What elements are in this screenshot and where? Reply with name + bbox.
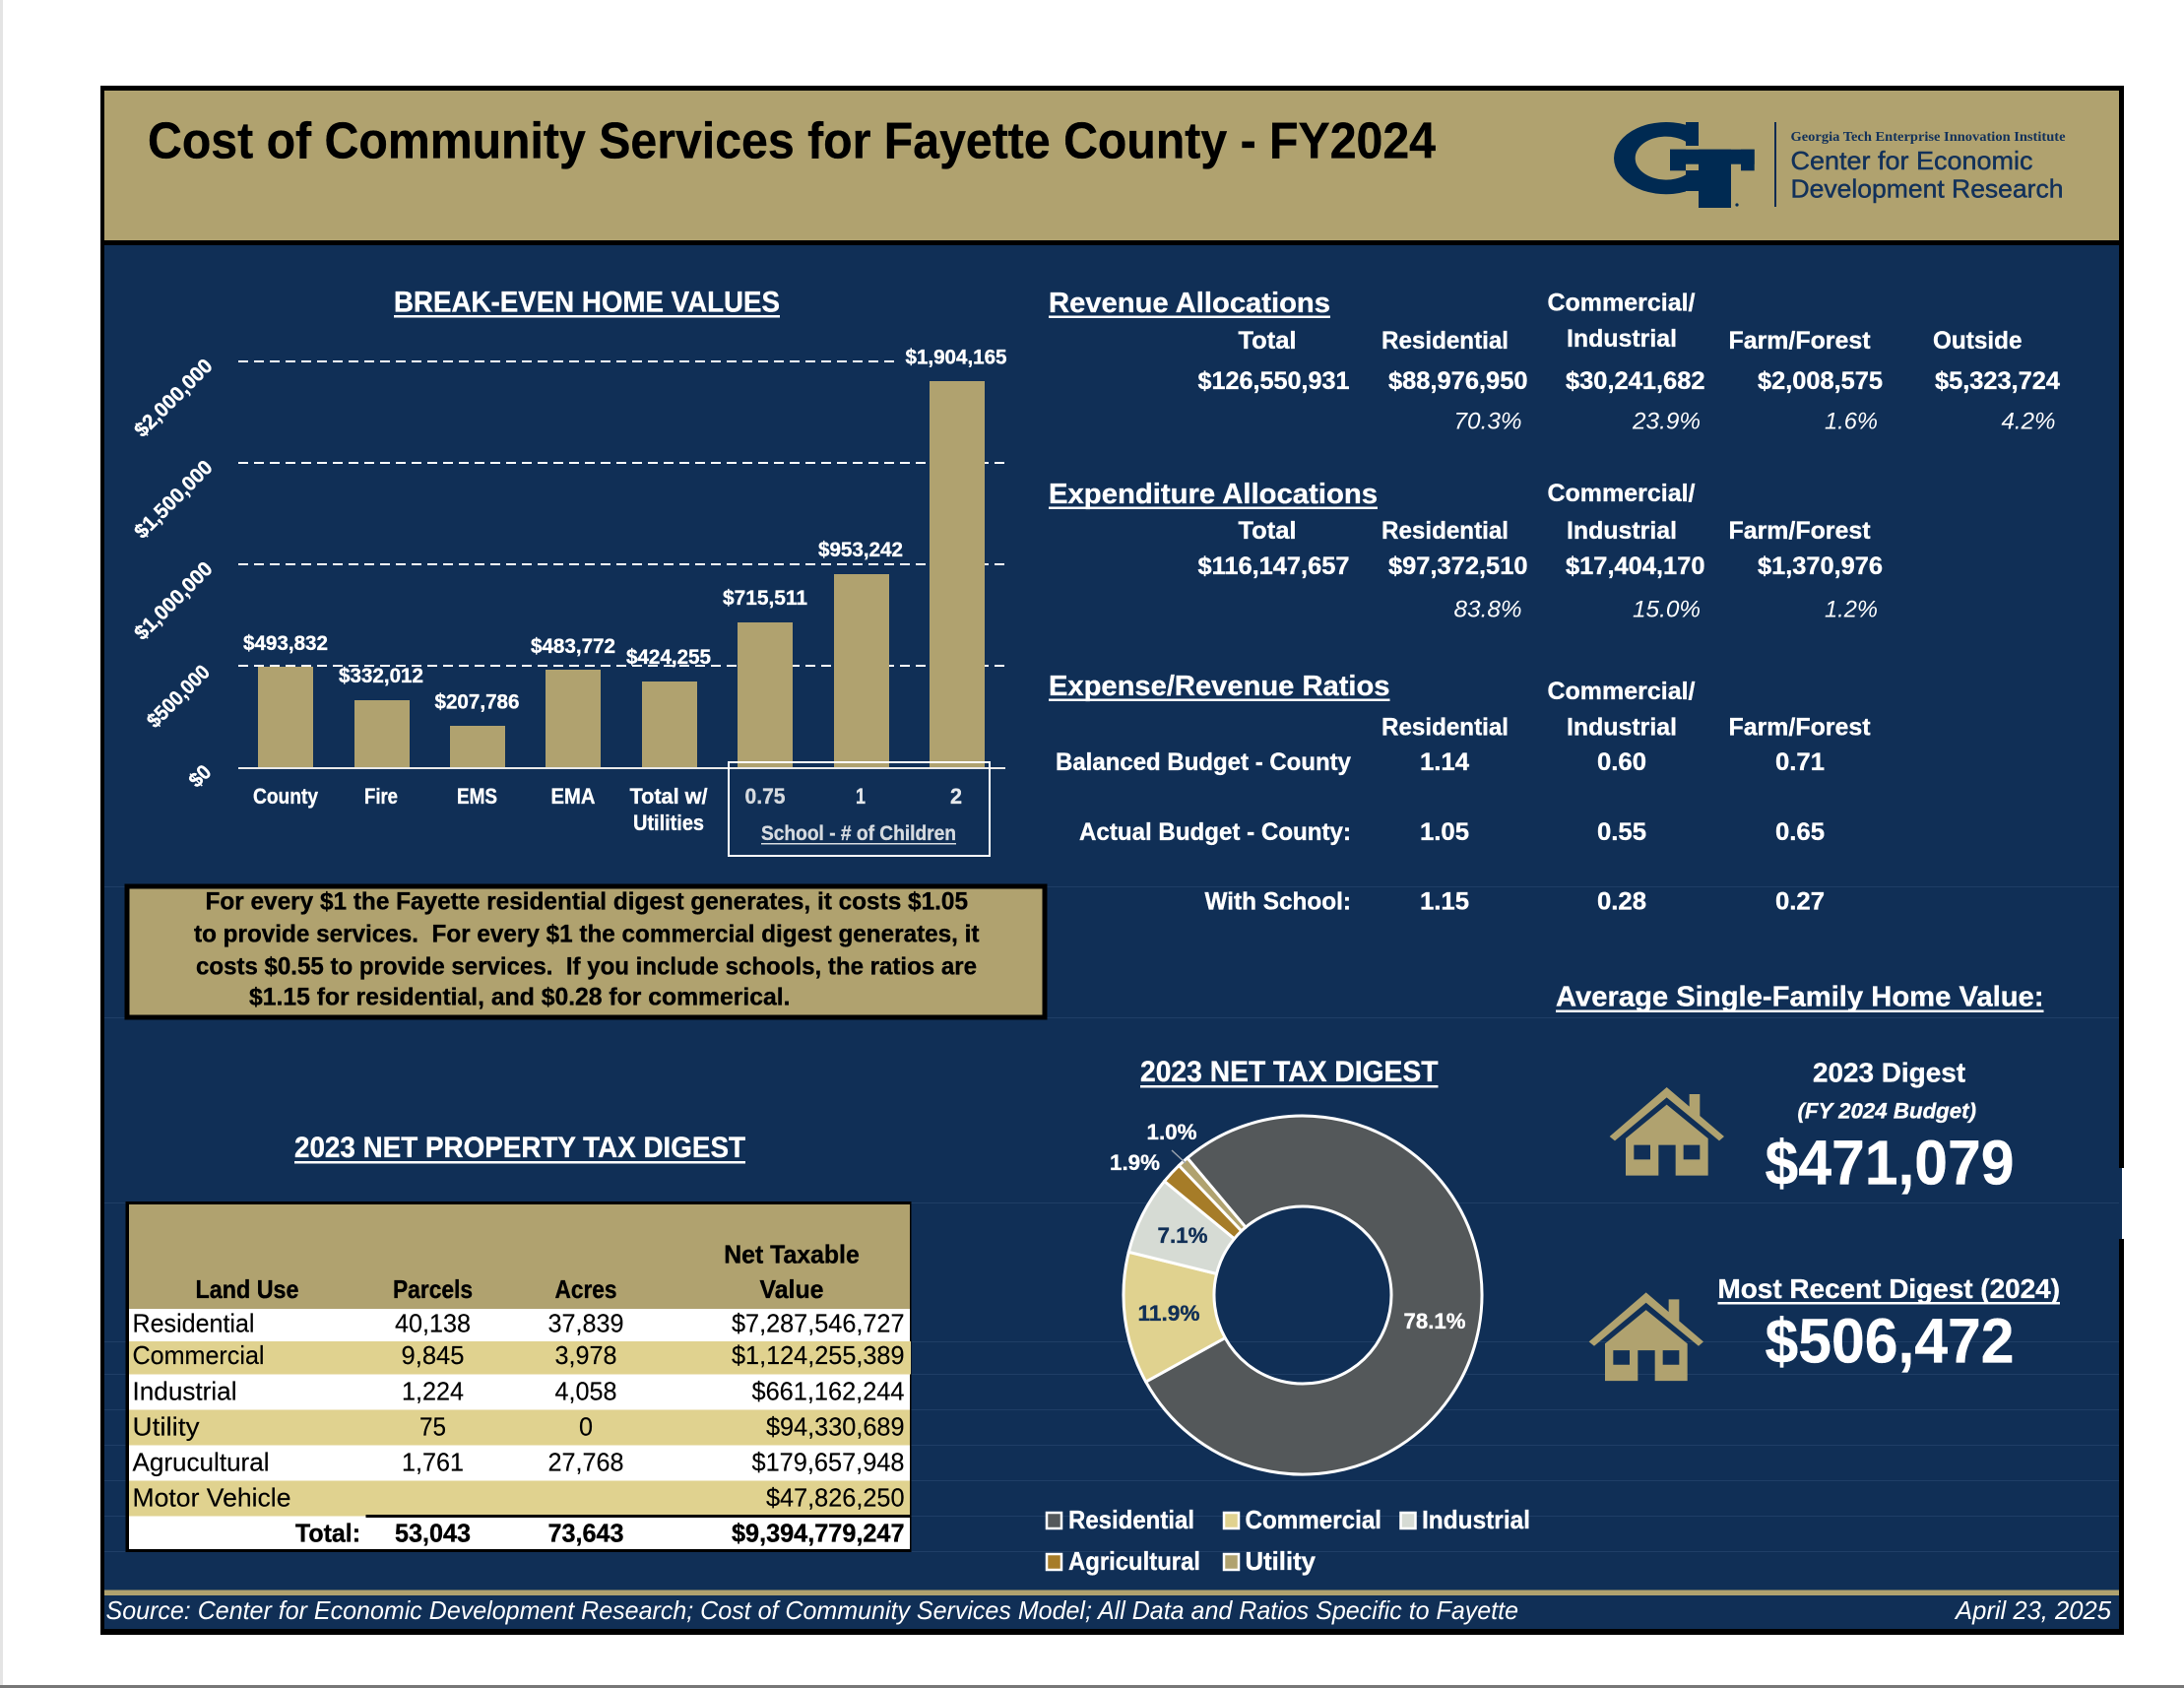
segment: residential 78.1% [1146,1116,1482,1474]
row labels: Commercial [132,1340,264,1370]
panel: expense/revenue ratios: Commercial/ [1548,678,1696,705]
panel: expenditure allocations: $116,147,657 [1197,552,1349,580]
bar value labels: $483,772 [531,635,615,658]
date: April 23, 2025 [1954,1595,2112,1625]
category labels [253,784,962,835]
callout: ratio summary: costs $0.55 to provide services. If you include schools, the ratios are [196,953,977,981]
legend: Agricultural [1068,1546,1200,1576]
callout: ratio summary: For every $1 the Fayette residential digest generates, it costs $1.05 [205,888,968,916]
parcels column: 1,224 [402,1377,464,1406]
table: net property tax digest [126,1201,912,1552]
row labels: Total: [295,1519,360,1548]
footer [104,1590,2119,1625]
logo mark [1614,122,1755,208]
heading: expense/revenue ratios: Expense/Revenue Ratios [1049,671,1390,702]
bar value labels: $332,012 [339,665,423,687]
panel: expense/revenue ratios: 0.55 [1597,818,1646,846]
net taxable value column: $94,330,689 [766,1412,904,1442]
row labels: Motor Vehicle [132,1483,291,1513]
category labels: Total w/ [630,784,707,809]
panel: revenue allocations: Industrial [1567,325,1677,353]
net taxable value column: $9,394,779,247 [732,1519,904,1548]
bars [258,381,985,768]
panel: expense/revenue ratios: 0.28 [1597,888,1646,916]
panel: revenue allocations: 23.9% [1632,408,1701,435]
heading: average single-family home value: Average Single-Family Home Value: [1556,981,2044,1012]
panel: expenditure allocations: Residential [1381,517,1509,545]
source note: Source: Center for Economic Development Research; Cost of Community Services Model; All Data and Ratios Specific to Fayette [106,1595,1518,1625]
panel: revenue allocations: Farm/Forest [1729,327,1871,355]
panel: expense/revenue ratios: 0.60 [1597,748,1646,776]
logo: Georgia Tech Center for Economic Development Research: Development Research [1790,173,2064,203]
bar value labels: $1,904,165 [906,347,1007,368]
parcels column: 53,043 [395,1519,471,1548]
row labels [132,1308,360,1548]
panel: revenue allocations: Residential [1381,327,1509,355]
panel: expenditure allocations: Total [1239,517,1296,545]
panel: expenditure allocations: Commercial/ [1548,480,1696,507]
row labels: Agrucultural [132,1448,270,1477]
donut labels [1110,1120,1465,1333]
header banner [104,91,2119,240]
donut labels: 11.9% [1138,1301,1199,1326]
panel: expenditure allocations: 15.0% [1633,597,1701,622]
panel: revenue allocations: Total [1239,327,1296,355]
heading: 2023 net property tax digest: 2023 NET PROPERTY TAX DIGEST [294,1132,745,1164]
segment: industrial 7.1% [1128,1181,1235,1273]
acres column [547,1308,624,1548]
panel: expenditure allocations [1049,479,1883,622]
stat: most recent digest value [1717,1273,2060,1377]
y axis labels: $500,000 [143,661,215,733]
logo: Georgia Tech Center for Economic Development Research [1614,122,2066,208]
acres column: 0 [579,1412,593,1442]
donut chart: 2023 net tax digest [1124,1116,1482,1474]
panel: expenditure allocations: Industrial [1567,517,1677,545]
y axis labels: $1,500,000 [130,456,218,544]
heading: expenditure allocations: Expenditure Allocations [1049,479,1378,510]
panel: revenue allocations: $5,323,724 [1935,367,2060,395]
panel: expense/revenue ratios: Farm/Forest [1729,713,1871,741]
panel: expenditure allocations: Farm/Forest [1729,517,1871,545]
legend: Industrial [1422,1505,1530,1534]
acres column: 3,978 [555,1340,616,1370]
panel: expense/revenue ratios: Actual Budget - County: [1079,818,1351,846]
bar value labels: $953,242 [818,539,903,561]
acres column: 73,643 [547,1519,624,1548]
panel: expense/revenue ratios [1049,671,1871,916]
segment: utility 1.0% [1179,1158,1246,1231]
callout: ratio summary: to provide services. For every $1 the commercial digest generates, it [194,920,980,947]
panel: revenue allocations: $88,976,950 [1388,367,1528,395]
panel: revenue allocations: 4.2% [2001,408,2056,435]
donut labels: 1.0% [1146,1120,1197,1144]
panel: revenue allocations [1049,288,2060,435]
net taxable value column: $179,657,948 [752,1448,904,1477]
heading: 2023 net tax digest: 2023 NET TAX DIGEST [1140,1056,1438,1088]
segment: agricultural 1.9% [1164,1165,1242,1239]
heading: revenue allocations: Revenue Allocations [1049,288,1330,319]
acres column: 4,058 [555,1377,616,1406]
panel: expense/revenue ratios: Residential [1381,713,1509,741]
row labels: Industrial [132,1377,236,1406]
category labels: County [253,784,319,809]
net taxable value column: $7,287,546,727 [732,1308,904,1337]
panel: expense/revenue ratios: With School: [1205,888,1351,916]
panel: revenue allocations: Commercial/ [1548,290,1696,317]
panel: revenue allocations: $30,241,682 [1566,367,1705,395]
panel: expense/revenue ratios: 0.65 [1775,818,1825,846]
panel: expense/revenue ratios: 1.05 [1420,818,1469,846]
parcels column: 40,138 [395,1308,471,1337]
panel: expense/revenue ratios: 0.27 [1775,888,1825,916]
y axis labels [130,355,218,792]
parcels column: 75 [419,1412,446,1442]
category labels: 1 [856,784,866,809]
category labels: EMA [551,784,596,809]
net taxable value column: $661,162,244 [752,1377,904,1406]
donut labels: 78.1% [1404,1309,1465,1333]
row labels: Residential [132,1308,254,1337]
category labels: EMS [457,784,497,809]
net taxable value column: $47,826,250 [766,1483,904,1513]
school bracket [729,762,990,856]
table header: Land Use [195,1274,299,1304]
stat: 2023 digest value: $471,079 [1765,1127,2015,1198]
bar value labels: $715,511 [723,587,807,610]
y axis labels: $1,000,000 [130,557,218,645]
panel: expenditure allocations: 83.8% [1453,597,1522,622]
icon: house (most recent digest) [1589,1292,1703,1381]
table header: Acres [555,1274,616,1304]
donut labels: 7.1% [1158,1223,1207,1248]
segment: commercial 11.9% [1124,1252,1225,1382]
panel: expense/revenue ratios: 1.15 [1420,888,1469,916]
panel: expenditure allocations: $1,370,976 [1758,552,1883,580]
icon: house (2023 digest) [1610,1087,1724,1176]
legend: Utility [1245,1546,1317,1576]
panel: expenditure allocations: 1.2% [1825,597,1878,622]
heading: break-even home values: BREAK-EVEN HOME VALUES [394,286,780,319]
parcels column: 9,845 [402,1340,465,1370]
bar value labels: $207,786 [435,691,520,713]
donut labels: 1.9% [1110,1150,1160,1175]
panel: expense/revenue ratios: Balanced Budget - County [1056,748,1351,776]
acres column: 37,839 [547,1308,624,1337]
legend [1047,1505,1530,1576]
parcels column: 1,761 [402,1448,464,1477]
panel: expense/revenue ratios: Industrial [1567,713,1677,741]
net taxable value column [732,1308,904,1548]
table header: Parcels [393,1274,473,1304]
bar value labels [243,347,1007,713]
table header: Net Taxable [724,1239,860,1268]
legend: Residential [1068,1505,1194,1534]
category labels: Utilities [633,811,704,835]
title: Cost of Community Services for Fayette County - FY2024 [148,112,1436,169]
panel: revenue allocations: $126,550,931 [1197,367,1350,395]
parcels column [395,1308,471,1548]
panel: expenditure allocations: $97,372,510 [1388,552,1528,580]
logo: Georgia Tech Center for Economic Development Research: Georgia Tech Enterprise Innovation Institute [1790,130,2066,145]
row labels: Utility [132,1412,199,1442]
panel: expense/revenue ratios: 0.71 [1775,748,1825,776]
table header: Value [760,1274,823,1304]
bar value labels: $424,255 [626,646,711,669]
panel: expense/revenue ratios: 1.14 [1420,748,1469,776]
panel: revenue allocations: 70.3% [1453,408,1522,435]
panel: revenue allocations: $2,008,575 [1758,367,1883,395]
panel: expenditure allocations: $17,404,170 [1566,552,1705,580]
category labels: 0.75 [744,784,786,809]
callout: ratio summary: $1.15 for residential, and $0.28 for commerical. [249,983,790,1010]
y axis labels: $2,000,000 [130,355,218,442]
net taxable value column: $1,124,255,389 [732,1340,904,1370]
legend: Commercial [1245,1505,1381,1534]
category labels: 2 [950,784,962,809]
stat: most recent digest value: Most Recent Digest (2024) [1717,1273,2060,1304]
panel: revenue allocations: 1.6% [1825,408,1878,435]
bar value labels: $493,832 [243,632,328,655]
panel: revenue allocations: Outside [1933,327,2023,355]
stat: 2023 digest value [1765,1058,2015,1198]
stat: most recent digest value: $506,472 [1765,1306,2015,1377]
table header [195,1239,860,1304]
y axis labels: $0 [184,760,216,792]
panel: break-even home values chart [130,286,1007,856]
callout: ratio summary [127,886,1045,1017]
stat: 2023 digest value: 2023 Digest [1813,1058,1965,1087]
acres column: 27,768 [547,1448,624,1477]
stat: 2023 digest value: (FY 2024 Budget) [1798,1099,1976,1123]
logo: Georgia Tech Center for Economic Development Research: Center for Economic [1790,146,2032,175]
category labels: Fire [364,784,398,809]
school bracket: School - # of Children [761,822,956,845]
